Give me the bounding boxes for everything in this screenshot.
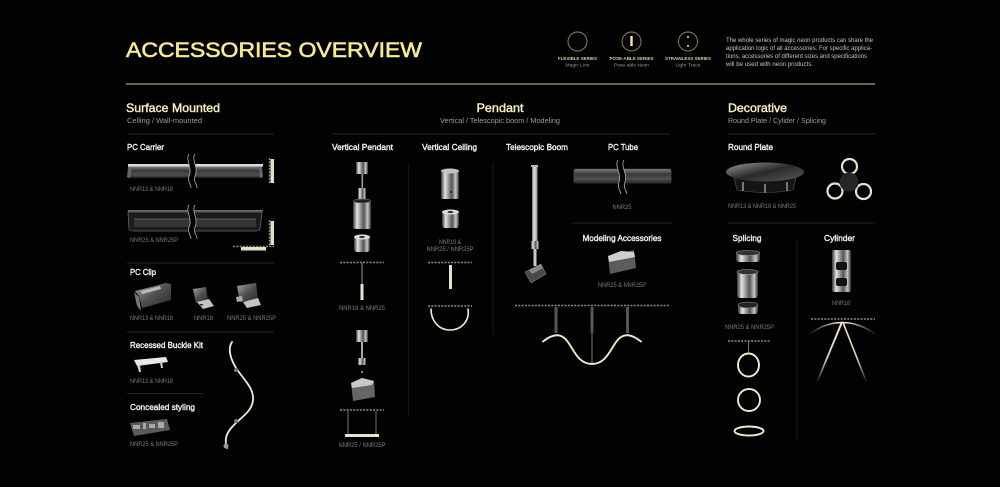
heading: cylinder: Cylinder: [824, 233, 855, 243]
heading: pc clip: PC Clip: [130, 267, 156, 277]
label: NNR25 & NNR25P: [130, 237, 178, 244]
label: NNR18 &: [439, 239, 462, 246]
heading: pendant: [440, 101, 560, 125]
trefoil lamp: [828, 159, 871, 199]
vertical ceiling kit: [441, 168, 459, 228]
icon: flexible series: [558, 24, 598, 68]
panel: pendant: [331, 101, 672, 449]
neon corner detail: [233, 220, 274, 250]
boom diagram: [515, 306, 670, 364]
splicing parts: [736, 250, 760, 314]
labels: NNR13 & NNR18: [130, 315, 173, 322]
label: NNR18 & NNR25: [339, 305, 385, 312]
round plate: [726, 162, 804, 193]
icon: clip medium: [236, 283, 261, 308]
heading: concealed styling: Concealed styling: [130, 402, 195, 412]
vertical pendant diagram: [340, 262, 384, 300]
vertical pendant kit: [353, 162, 371, 252]
neon section detail: [270, 158, 274, 184]
intro text: tions, accessories of different sizes and specifications: [726, 53, 867, 60]
intro text: will be used with neon products.: [725, 61, 813, 68]
headings: Vertical Ceiling: [422, 142, 477, 152]
icon: strainless series: STRAINLESS SERIES: [665, 56, 712, 62]
label: NNR25 / NNR25P: [426, 246, 474, 253]
icon: flexible series: FLEXIBLE SERIES: [558, 56, 598, 62]
labels: NNR25 & NNR25P: [227, 315, 276, 322]
pc tube: [574, 160, 671, 194]
heading: surface mounted: Celling / Wall-mounted: [127, 116, 202, 125]
neon curve: [224, 342, 253, 448]
ring diagrams: [728, 341, 771, 436]
label: NNR25 & NNR25P: [598, 282, 646, 289]
icon: clip small: [193, 287, 214, 309]
series icons: [558, 24, 712, 68]
icon: buckle: [134, 357, 168, 372]
label: NNR13 & NNR18: [130, 378, 173, 385]
heading: round plate: Round Plate: [728, 142, 773, 152]
label: NNR13 & NNR18 & NNR25: [728, 203, 796, 210]
telescopic boom: [525, 165, 546, 283]
heading: recessed buckle kit: Recessed Buckle Kit: [130, 340, 204, 350]
labels: NNR18: [194, 315, 213, 322]
headings: Telescopic Boom: [506, 142, 568, 152]
icon: clip large: [134, 283, 171, 311]
icon: concealed clip: [130, 419, 170, 436]
intro text: The whole series of magic neon products can share the: [726, 37, 874, 44]
heading: pendant: Vertical / Telescopic boom / Modeling: [440, 116, 560, 125]
title: ACCESSORIES OVERVIEW: [126, 38, 423, 62]
heading: decorative: Decorative: [728, 101, 787, 115]
intro text: application logic of all accessories. For specific applica-: [726, 45, 872, 52]
headings: PC Tube: [608, 142, 638, 152]
ceiling diagram curve: [428, 306, 472, 330]
label: NNR18: [832, 300, 850, 307]
label: NNR25 & NNR25P: [725, 324, 774, 331]
labels: [130, 315, 276, 322]
heading: splicing: Splicing: [732, 233, 762, 243]
label: NNR25 & NNR25P: [130, 441, 178, 448]
icon: flexible series: Magic Line: [566, 62, 590, 68]
pendant diagram two: [340, 410, 384, 437]
label: [426, 239, 474, 253]
label: NNR25 / NNR25P: [338, 442, 386, 449]
panel: decorative: [725, 101, 877, 440]
heading: modeling accessories: Modeling Accessories: [582, 233, 662, 243]
pc carrier narrow: [127, 154, 263, 188]
icon: modeling accessory: [608, 250, 636, 274]
cylinder: [832, 250, 851, 292]
heading: pendant: Pendant: [476, 101, 524, 115]
heading: decorative: Round Plate / Cylider / Splicing: [728, 116, 826, 125]
heading: pc carrier: PC Carrier: [127, 142, 164, 152]
headings: [332, 142, 638, 152]
icon: pose-able series: Pose-able Neon: [614, 62, 649, 68]
icon: strainless series: [665, 24, 712, 68]
panel: surface mounted: [126, 101, 276, 448]
icon: pose-able series: POSE-ABLE SERIES: [610, 56, 654, 62]
ceiling diagram straight: [428, 262, 472, 289]
heading: surface mounted: [126, 101, 220, 125]
cylinder diagram: [808, 319, 877, 383]
pendant kit two: [351, 330, 375, 401]
intro text: [725, 37, 874, 68]
label: NNR13 & NNR18: [130, 186, 173, 193]
icon: strainless series: Light Trace: [676, 62, 701, 68]
heading: decorative: [728, 101, 826, 125]
icon: pose-able series: [610, 24, 654, 68]
pc carrier wide: [128, 205, 263, 239]
label: NNR25: [612, 204, 632, 211]
headings: Vertical Pendant: [332, 142, 394, 152]
heading: surface mounted: Surface Mounted: [126, 101, 220, 115]
